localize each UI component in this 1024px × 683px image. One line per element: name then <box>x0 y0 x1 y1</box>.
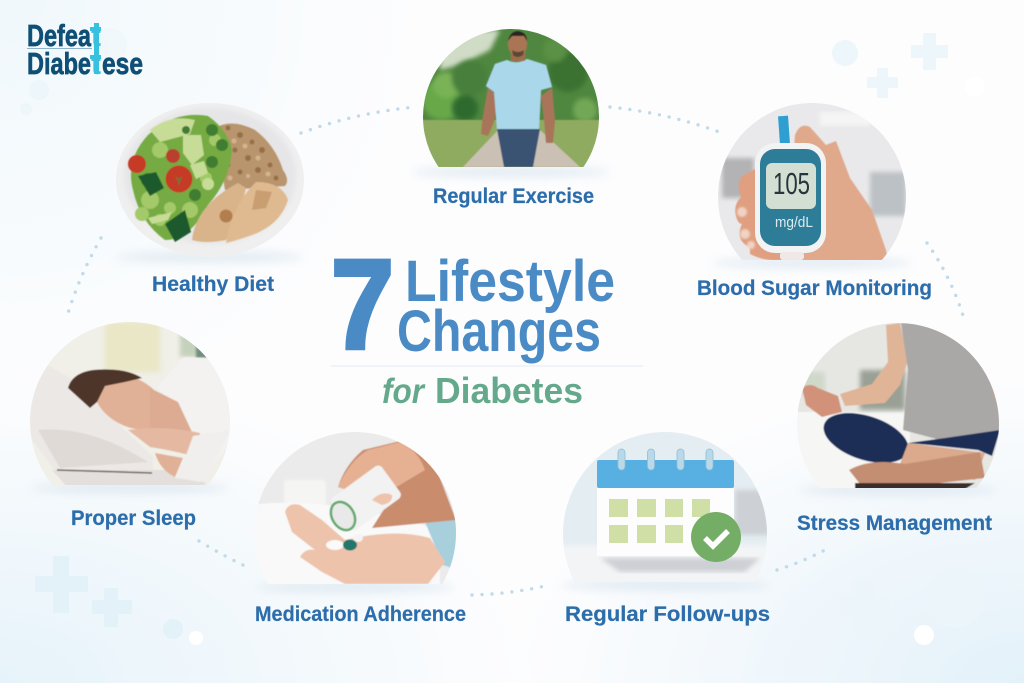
title: 7 <box>331 233 394 375</box>
title: Diabetes <box>435 370 583 411</box>
logo: t <box>91 18 101 53</box>
icon: plate with salad, grains and chicken <box>116 103 304 257</box>
logo: Defea <box>27 18 92 53</box>
photo: man walking on a park path <box>420 25 605 170</box>
panel: medication adherence <box>250 428 466 626</box>
photo: hand holding glucose meter: 105 <box>773 166 810 201</box>
label: Regular Follow-ups: Regular Follow-ups <box>565 603 770 626</box>
title: Lifestyle <box>405 249 615 314</box>
photo: woman sleeping on a pillow <box>30 322 230 485</box>
panel: regular exercise <box>419 29 603 208</box>
label: Stress Management: Stress Management <box>797 512 992 535</box>
dotted connector arcs <box>66 107 965 595</box>
label: Regular Exercise: Regular Exercise <box>433 185 594 208</box>
logo: Diabe <box>27 46 91 81</box>
panel: blood sugar monitoring <box>697 100 932 300</box>
panel: proper sleep <box>25 315 235 530</box>
panel: healthy diet <box>115 103 305 296</box>
photo: hand holding glucose meter <box>718 103 906 260</box>
photo: hand holding glucose meter: mg/dL <box>775 214 813 231</box>
panel: regular follow-ups <box>558 428 775 626</box>
photo: person meditating cross-legged <box>797 323 999 488</box>
label: Proper Sleep: Proper Sleep <box>71 507 196 530</box>
icon: calendar with check mark <box>563 432 767 582</box>
label: Medication Adherence: Medication Adherence <box>255 603 466 626</box>
logo: ese <box>102 46 143 81</box>
panel: stress management <box>790 318 1005 535</box>
photo: pills poured into a hand <box>258 432 456 584</box>
label: Blood Sugar Monitoring: Blood Sugar Monitoring <box>697 277 932 300</box>
logo: t <box>91 46 101 81</box>
title <box>331 233 643 411</box>
label: Healthy Diet: Healthy Diet <box>152 273 274 296</box>
logo <box>27 18 143 81</box>
title: Changes <box>397 299 601 364</box>
title: for <box>382 372 426 411</box>
